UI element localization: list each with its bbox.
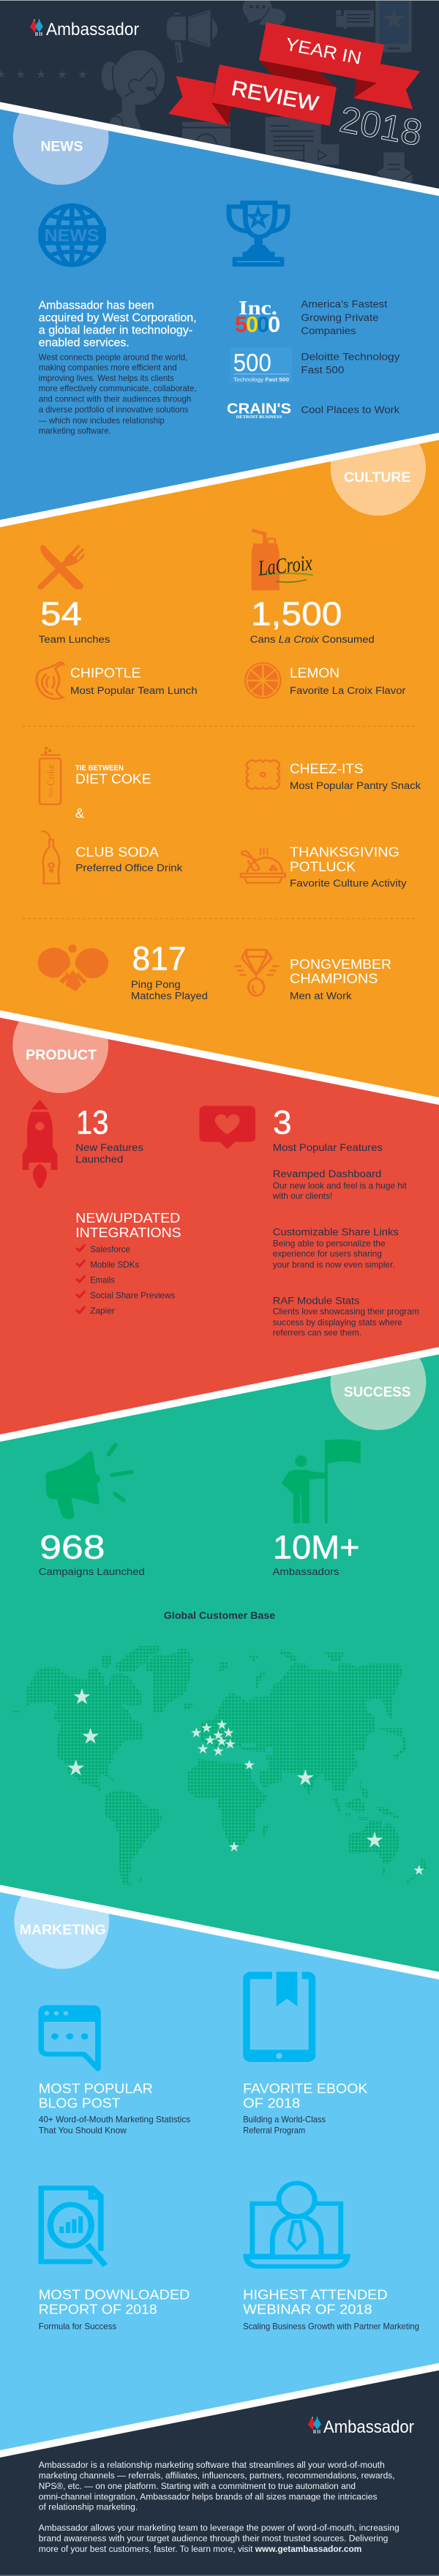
report text: Formula for Success [39,2322,116,2332]
blog post text: MOST POPULAR [39,2081,153,2096]
culture background [0,440,439,1098]
stat: 1,500 cans: 1,500 [251,595,342,632]
West description: West connects people around the world, [39,352,187,362]
success background [0,1354,439,1972]
pongvember text: Men at Work [290,991,353,1002]
icon: blog post [38,2005,101,2069]
footer background [0,2371,439,2576]
icon: lemon [245,663,280,698]
Deloitte label: Fast 500 [301,365,345,377]
acquisition statement: acquired by West Corporation, [39,311,197,324]
feature: customizable share links [273,1226,399,1269]
stat: 13 new features: 13 [76,1104,108,1141]
stat: 54 team lunches: Team Lunches [39,634,110,646]
panel: product [0,997,439,1435]
footer logo: Ambassador [323,2417,414,2437]
pongvember text [290,956,391,1002]
ribbon [168,23,420,126]
feature: revamped dashboard: with our clients! [272,1190,332,1201]
thanksgiving text [290,845,408,890]
Inc 5000 label: Companies [301,325,356,337]
Inc 5000 label [301,299,387,337]
stat: 3 popular features [273,1104,383,1154]
feature: customizable share links: experience for users sharing [273,1248,382,1258]
ebook text: Building a World-Class [243,2115,326,2125]
West description: marketing software. [39,426,111,436]
integrations checklist: Salesforce [90,1244,130,1254]
stat: 1,500 cans [250,595,375,646]
customer location stars [67,1688,424,1875]
ribbon: YEAR IN [284,34,363,69]
chipotle text: Most Popular Team Lunch [70,685,198,697]
icon: La Croix can: LaCroix [257,551,314,581]
West description: more effectively communicate, collaborate, [39,383,197,393]
marketing background [0,1892,439,2450]
stat: 817 ping pong matches: Ping Pong [131,979,181,991]
marketing badge [14,1897,110,1969]
ebook text: OF 2018 [243,2096,300,2111]
icon: medal [234,950,279,996]
integrations checklist: Emails [90,1274,115,1285]
integrations checklist: Social Share Previews [90,1290,175,1300]
chart: dotted world map [12,1646,427,1885]
cheez-its text: CHEEZ-ITS [290,761,364,777]
about paragraph one: of relationship marketing. [39,2501,138,2512]
stat: 817 ping pong matches: Matches Played [131,991,208,1002]
Inc 5000 logo: 5 [235,311,247,337]
panel: footer [0,2371,439,2576]
feature: RAF module stats: success by displaying stats where [273,1317,402,1327]
panel: culture [0,420,439,1098]
chipotle text: CHIPOTLE [70,665,140,681]
stat: 13 new features: Launched [75,1154,123,1166]
Crain's logo: CRAIN'S [227,401,291,418]
thanksgiving text: THANKSGIVING [290,845,399,860]
icon: report with magnifier [41,2188,105,2265]
integrations heading: INTEGRATIONS [75,1225,181,1240]
Deloitte Fast 500 logo: 500 [233,349,271,377]
icon: person with flag [282,1439,361,1523]
blog post text: BLOG POST [39,2096,120,2111]
thanksgiving text: Favorite Culture Activity [290,878,408,890]
culture badge: CULTURE [344,469,410,486]
Inc 5000 label: America's Fastest [301,299,387,311]
integrations checklist [76,1244,175,1315]
lemon text [290,665,406,697]
about paragraph two [39,2523,399,2554]
Inc 5000 logo: 0 [246,311,258,337]
feature: customizable share links: your brand is now even simpler. [273,1259,395,1269]
Deloitte Fast 500 logo [230,347,292,383]
stat: 13 new features [75,1104,143,1166]
West description [39,352,197,436]
West description: improving lives. West helps its clients [39,373,174,383]
marketing badge: MARKETING [20,1922,106,1938]
integrations checklist: Mobile SDKs [90,1259,139,1269]
feature: revamped dashboard: Revamped Dashboard [273,1168,381,1180]
icon: chipotle pepper [37,662,64,699]
acquisition statement: enabled services. [39,336,130,349]
thanksgiving text: POTLUCK [290,859,356,875]
acquisition statement: a global leader in technology- [39,324,192,336]
panel: header [0,0,439,192]
feature: RAF module stats: referrers can see them. [273,1327,361,1337]
icon: diet coke can: Coke [45,764,57,786]
icon: cheez-it cracker [247,760,279,789]
report text: REPORT OF 2018 [39,2302,157,2317]
ebook text [243,2081,368,2136]
success badge [331,1359,426,1430]
West description: — which now includes relationship [39,415,165,426]
feature: RAF module stats [273,1295,419,1337]
stat: 968 campaigns: Campaigns Launched [39,1566,145,1578]
integrations heading: NEW/UPDATED [75,1210,180,1225]
about paragraph one [39,2460,395,2512]
West description: a diverse portfolio of innovative solutions [39,404,188,415]
feature: RAF module stats: Clients love showcasing their program [273,1306,419,1316]
stat: 54 team lunches: 54 [40,595,82,632]
icon: trophy [229,203,288,267]
about paragraph one: Ambassador is a relationship marketing software that streamlines all your word-of-mouth [39,2460,385,2470]
logo: Ambassador [46,20,139,39]
feature: revamped dashboard [272,1168,407,1201]
dotted continents [12,1646,427,1885]
icon: news globe: NEWS [44,226,100,246]
faint background icons [0,0,412,192]
news badge: NEWS [41,139,83,155]
about paragraph one: omni-channel integration, Ambassador helps brands of all sizes manage the intricacies [39,2491,378,2501]
icon: megaphone [45,1445,132,1519]
news background [0,110,439,520]
blog post text: 40+ Word-of-Mouth Marketing Statistics [39,2115,190,2125]
about paragraph one: NPS®, etc. — on one platform. Starting with a commitment to true automation and [39,2481,356,2491]
panel: success [0,1334,439,1972]
West description: and connect with their audiences through [39,394,191,404]
news badge [13,113,108,185]
blog post text [39,2081,190,2136]
lemon text: Favorite La Croix Flavor [290,685,406,697]
about paragraph two: brand awareness with your target audience through their most trusted sources. Delivering [39,2534,389,2544]
feature: customizable share links: Being able to personalize the [273,1238,386,1248]
about paragraph two: Ambassador allows your marketing team to leverage the power of word-of-mouth, increasing [39,2523,399,2533]
Inc 5000 logo [235,297,280,337]
webinar text: HIGHEST ATTENDED [243,2287,388,2303]
report text [39,2287,190,2332]
stat: 10M+ ambassadors: 10M+ [273,1529,360,1566]
icon: diet coke can [40,747,61,804]
stat: 54 team lunches [39,595,110,646]
ebook text: Referral Program [243,2126,305,2136]
icon: webinar presenter on laptop [243,2183,350,2269]
about paragraph two: more of your best customers, faster. To learn more, visit www.getambassador.com [39,2544,361,2554]
year 2018 outline: 2018 [337,99,425,154]
blog post text: That You Should Know [39,2126,127,2136]
icon: thanksgiving turkey [241,848,285,883]
header background [0,0,439,189]
stat: 968 campaigns [39,1529,145,1578]
stat: 3 popular features: Most Popular Features [273,1142,383,1154]
feature: revamped dashboard: Our new look and feel is a huge hit [273,1180,407,1190]
integrations heading [75,1210,181,1240]
stat: 13 new features: New Features [75,1142,143,1154]
about paragraph one: marketing channels — referrals, affiliates, influencers, partners, recommendations, rewards, [39,2470,395,2480]
panel: marketing [0,1874,439,2450]
Deloitte label [301,352,400,377]
chipotle text [70,665,198,697]
Inc 5000 logo: 0 [268,311,280,337]
webinar text [243,2287,419,2332]
culture badge [331,444,426,516]
diet coke text: DIET COKE [75,771,151,787]
Inc 5000 logo: 0 [257,311,269,337]
icon: club soda bottle [41,831,59,883]
panel: news [0,89,439,520]
star row [0,70,87,78]
diet coke text [75,764,151,820]
Inc 5000 label: Growing Private [301,312,379,324]
pongvember text: PONGVEMBER [290,956,391,972]
integrations checklist: Zapier [90,1305,115,1315]
webinar text: Scaling Business Growth with Partner Marketing [243,2322,419,2332]
stat: 968 campaigns: 968 [40,1529,105,1566]
Inc 5000 logo: Inc. [239,297,277,319]
webinar text: WEBINAR OF 2018 [243,2302,372,2317]
product badge [12,1021,108,1093]
ribbon: REVIEW [230,77,320,116]
Deloitte label: Deloitte Technology [301,352,400,363]
product badge: PRODUCT [26,1047,97,1063]
cheez-its text: Most Popular Pantry Snack [290,780,421,792]
icon: diet coke can: Diet [48,787,54,798]
icon: fork and knife [40,545,85,589]
report text: MOST DOWNLOADED [39,2287,190,2303]
cheez-its text [290,761,421,792]
stat: 1,500 cans: Cans La Croix Consumed [250,634,375,646]
product background [0,1018,439,1435]
icon: ebook tablet [243,1971,315,2062]
club soda text: Preferred Office Drink [75,863,183,875]
success badge: SUCCESS [344,1384,410,1400]
Crain's label: Cool Places to Work [301,404,400,416]
feature: customizable share links: Customizable Share Links [273,1226,399,1238]
West description: making companies more efficient and [39,363,177,373]
stat: 3 popular features: 3 [273,1104,292,1141]
diet coke text: TIE BETWEEN [75,764,124,772]
icon: news globe [40,205,104,265]
lemon text: LEMON [290,665,339,681]
stat: 10M+ ambassadors: Ambassadors [272,1566,339,1578]
acquisition statement: Ambassador has been [39,299,154,311]
Deloitte Fast 500 logo: Technology Fast 500 [233,377,289,383]
Crain's logo: DETROIT BUSINESS [236,415,282,420]
acquisition statement [39,299,197,349]
club soda text: CLUB SODA [75,845,160,860]
diet coke text: & [75,805,85,820]
icon: heart notification [199,1106,255,1149]
icon: La Croix can [252,530,314,590]
stat: 817 ping pong matches: 817 [132,940,187,978]
icon: rocket [23,1100,57,1188]
ebook text: FAVORITE EBOOK [243,2081,368,2096]
club soda text [75,845,183,875]
stat: 817 ping pong matches [131,940,208,1002]
map title: Global Customer Base [164,1609,275,1621]
feature: RAF module stats: RAF Module Stats [273,1295,359,1307]
icon: ping pong paddles [38,945,108,992]
pongvember text: CHAMPIONS [290,971,378,986]
